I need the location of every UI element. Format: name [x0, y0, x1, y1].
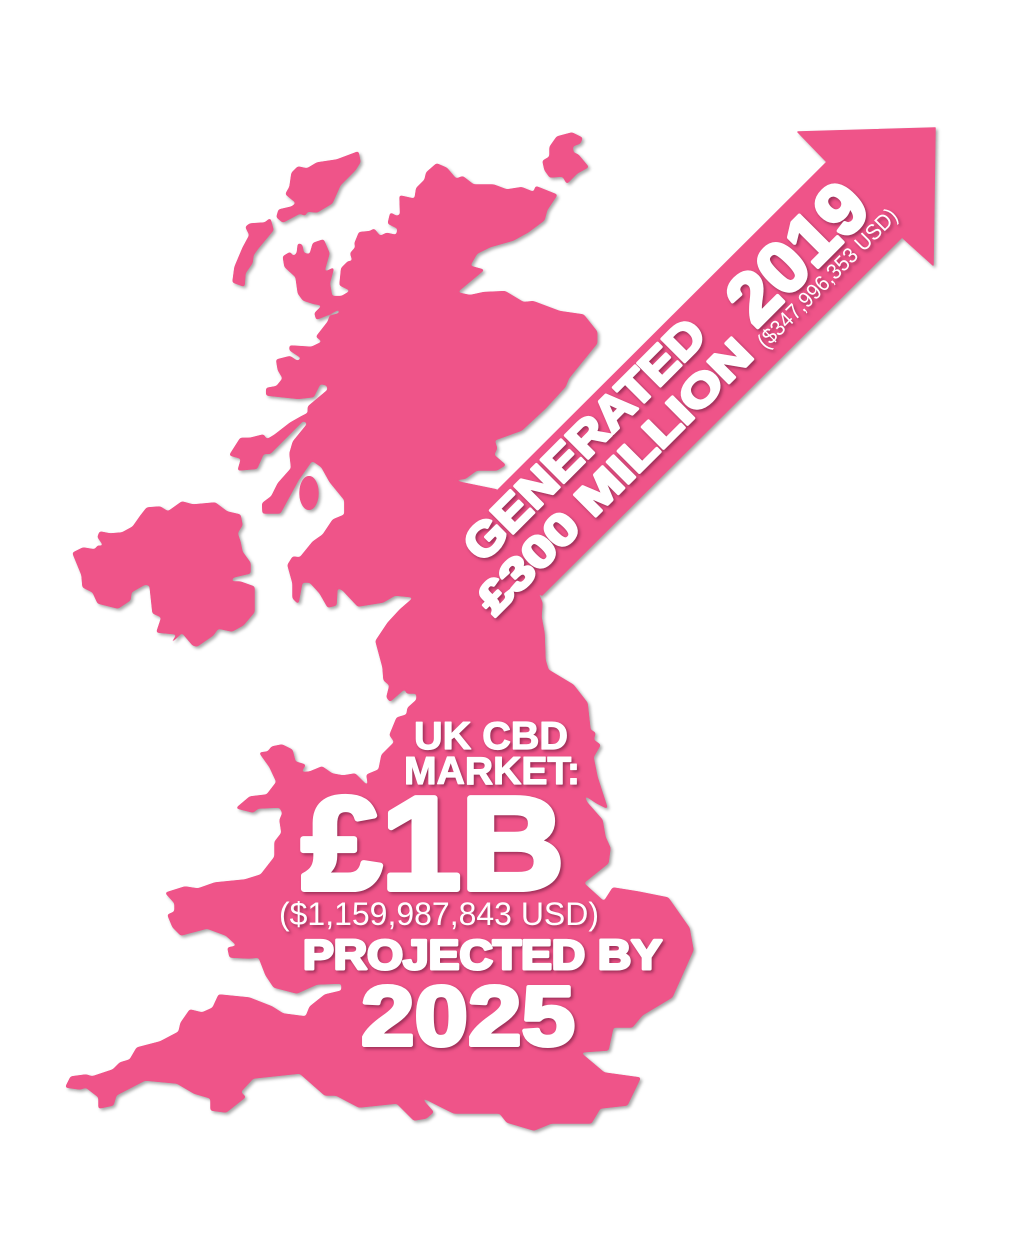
UK map with growth arrow	[66, 128, 935, 1130]
map shapes	[66, 133, 693, 1130]
year: 2019: 2019	[711, 166, 885, 340]
heading: projected by: PROJECTED BY	[303, 931, 662, 978]
heading: 300 million: £300 MILLION	[467, 329, 762, 624]
map: Shetland	[543, 133, 588, 183]
market text	[279, 715, 662, 1063]
usd value: 2019: ($347,996,353 USD)	[752, 203, 902, 354]
map: Lewis and Harris	[277, 152, 360, 222]
usd value: market: ($1,159,987,843 USD)	[279, 896, 599, 932]
map: England and Wales	[66, 470, 693, 1130]
big value: 1B: £1B	[302, 770, 564, 917]
heading: market: MARKET:	[404, 750, 580, 793]
map: Arran	[300, 476, 318, 510]
map: Scotland	[230, 164, 597, 513]
heading: UK CBD: UK CBD	[414, 715, 568, 758]
map: Northern Ireland	[73, 502, 254, 646]
year: 2025: 2025	[361, 969, 575, 1063]
map: Uist	[233, 219, 273, 286]
arrow	[498, 128, 935, 595]
arrow text	[452, 166, 902, 624]
heading: generated: GENERATED	[452, 307, 716, 571]
